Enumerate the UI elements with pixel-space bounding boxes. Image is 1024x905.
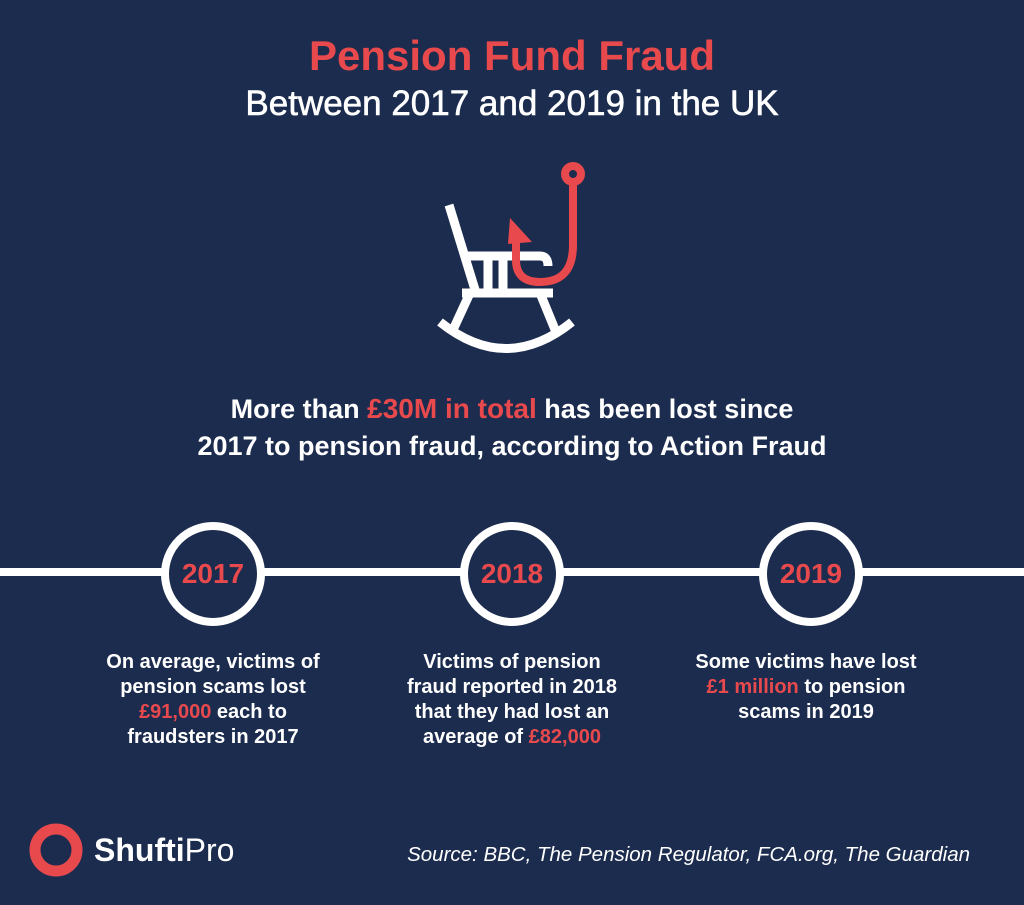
caption 2017: pension scams lost — [120, 676, 306, 698]
caption 2017: £91,000 each to — [139, 701, 287, 723]
headline statement: More than £30M in total has been lost since — [231, 393, 793, 424]
caption 2017: fraudsters in 2017 — [127, 726, 299, 748]
caption 2017 — [106, 651, 320, 748]
caption 2019: scams in 2019 — [738, 701, 874, 723]
logo text: ShuftiPro — [94, 832, 234, 868]
year 2019 — [759, 522, 863, 626]
source: Source: BBC, The Pension Regulator, FCA.org, The Guardian — [407, 843, 970, 866]
caption 2019 — [695, 651, 917, 723]
caption 2018: that they had lost an — [415, 701, 609, 723]
year 2018: 2018 — [481, 558, 543, 589]
timeline line — [0, 568, 1024, 576]
caption 2018 — [407, 651, 617, 748]
year 2017: 2017 — [182, 558, 244, 589]
logo — [30, 824, 234, 876]
year 2017 — [161, 522, 265, 626]
caption 2019: Some victims have lost — [695, 651, 917, 673]
caption 2018: fraud reported in 2018 — [407, 676, 617, 698]
caption 2019: £1 million to pension — [707, 676, 905, 698]
caption 2018: average of £82,000 — [423, 726, 601, 748]
headline statement: 2017 to pension fraud, according to Action Fraud — [197, 431, 827, 461]
subtitle: Between 2017 and 2019 in the UK — [245, 84, 779, 123]
logo mark — [30, 824, 82, 876]
title: Pension Fund Fraud — [309, 32, 715, 79]
caption 2017: On average, victims of — [106, 651, 320, 673]
icon: rocking chair with hook — [437, 162, 585, 353]
year 2019: 2019 — [780, 558, 842, 589]
caption 2018: Victims of pension — [423, 651, 601, 673]
year 2018 — [460, 522, 564, 626]
headline statement — [197, 393, 827, 461]
